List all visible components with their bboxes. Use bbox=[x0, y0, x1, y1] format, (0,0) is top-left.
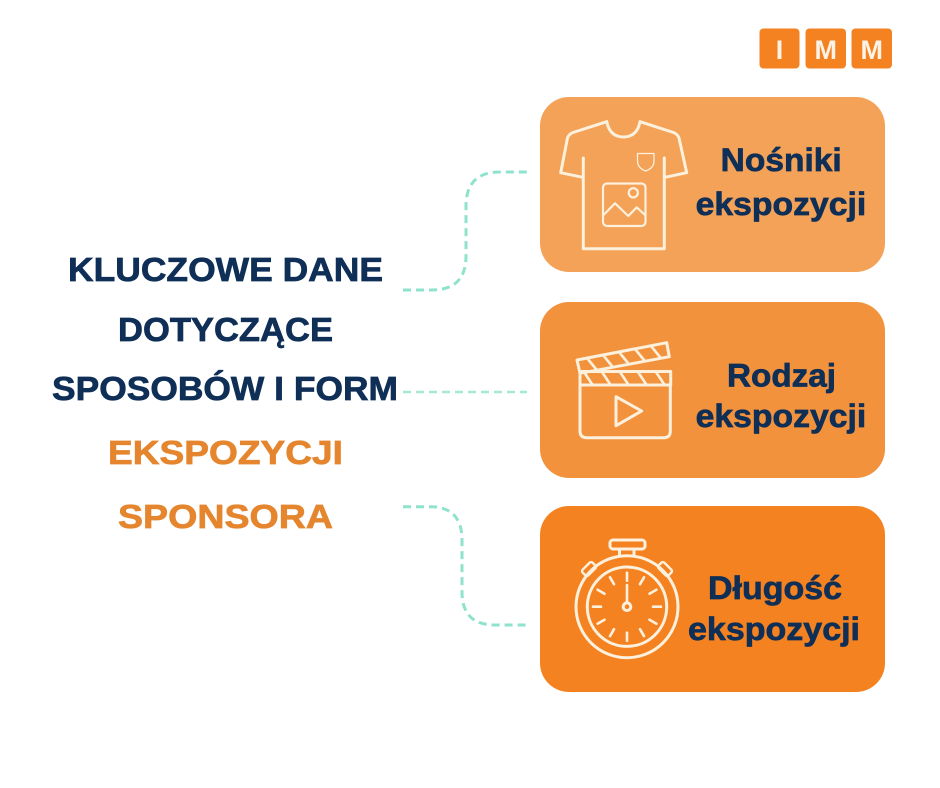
title: key data on sponsor exposure: EKSPOZYCJI bbox=[108, 434, 343, 471]
label: ekspozycji: ekspozycji bbox=[688, 611, 860, 647]
title: key data on sponsor exposure: SPOSOBÓW I FORM bbox=[52, 370, 398, 407]
label: Długość: Długość bbox=[708, 570, 842, 606]
icon: t-shirt with image bbox=[561, 122, 687, 249]
label: Nośniki: Nośniki bbox=[721, 142, 842, 178]
logo: IMM: M bbox=[860, 35, 883, 65]
logo: IMM bbox=[760, 28, 892, 68]
logo: IMM: I bbox=[776, 35, 783, 65]
title: key data on sponsor exposure: DOTYCZĄCE bbox=[118, 311, 333, 348]
logo: IMM: M bbox=[814, 35, 837, 65]
connector: title to first panel bbox=[403, 172, 527, 290]
panel: Rodzaj ekspozycji bbox=[540, 302, 885, 478]
title: key data on sponsor exposure bbox=[52, 251, 398, 535]
label: ekspozycji: ekspozycji bbox=[696, 398, 866, 434]
panel: Długość ekspozycji bbox=[540, 506, 885, 692]
connector: title to third panel bbox=[403, 507, 527, 625]
label: Rodzaj: Rodzaj bbox=[727, 358, 836, 394]
icon: film clapperboard bbox=[577, 343, 671, 438]
connector: title to second panel bbox=[403, 391, 527, 393]
icon: stopwatch bbox=[576, 540, 678, 658]
title: key data on sponsor exposure: KLUCZOWE DANE bbox=[68, 251, 383, 288]
panel: Nośniki ekspozycji bbox=[540, 97, 885, 272]
title: key data on sponsor exposure: SPONSORA bbox=[118, 498, 333, 535]
label: ekspozycji: ekspozycji bbox=[696, 186, 866, 222]
